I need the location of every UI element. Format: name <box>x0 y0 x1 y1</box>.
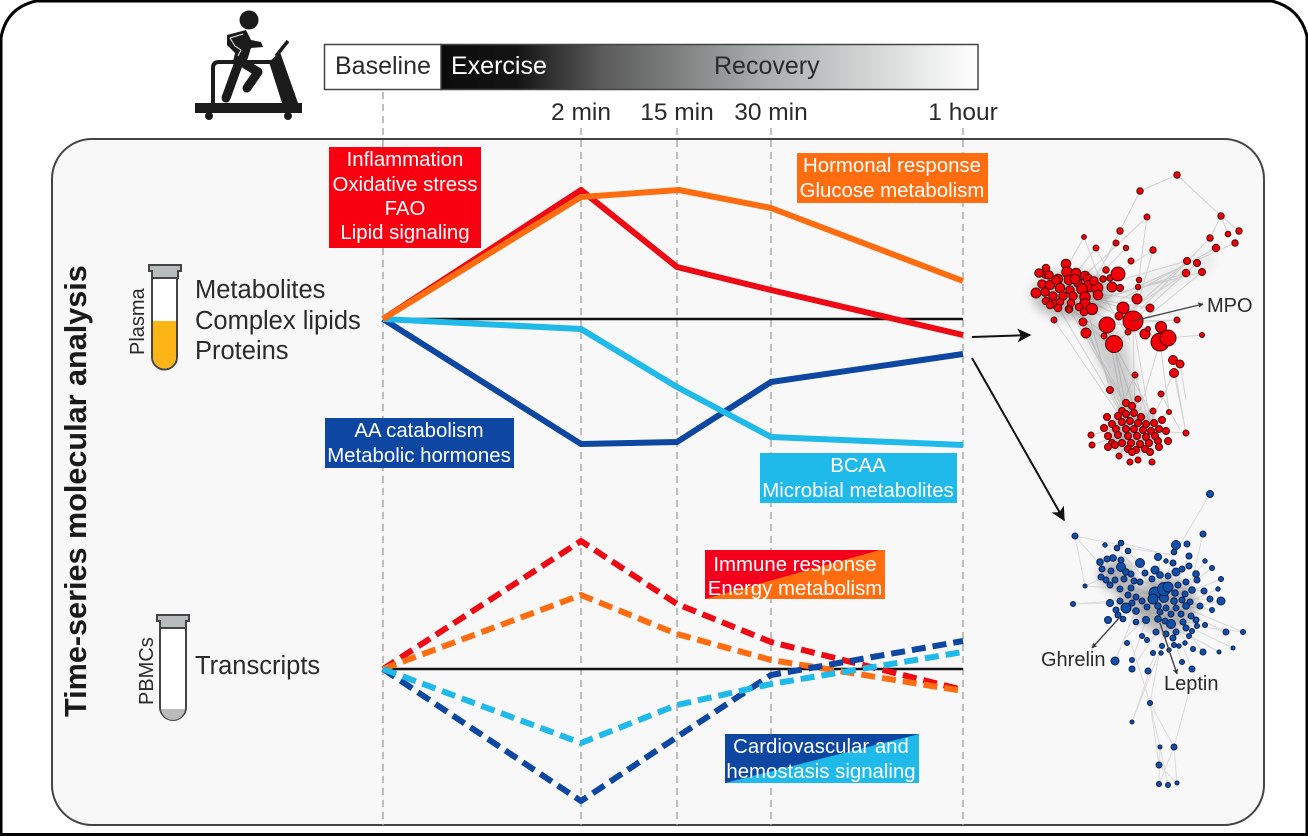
text: plasma analytes <box>195 276 361 365</box>
panel: time-series analysis <box>52 139 1264 825</box>
chart: transcript trajectories <box>383 541 963 801</box>
arrow: to blue network <box>972 358 1064 520</box>
callout: BCAA: Microbial metabolites <box>762 480 954 502</box>
timeline bar: Exercise <box>451 52 547 80</box>
callout: inflammation <box>329 147 481 248</box>
chart: plasma trajectories <box>383 190 963 445</box>
callout: inflammation: FAO <box>385 198 425 220</box>
callout: cardiovascular: hemostasis signaling <box>726 761 916 783</box>
timeline bar <box>324 44 978 90</box>
icon: person running on treadmill <box>195 10 302 120</box>
arrow: to red network <box>972 335 1030 337</box>
label: plasma: Plasma <box>127 287 149 355</box>
callout: cardiovascular <box>725 734 919 783</box>
callout: inflammation: Oxidative stress <box>332 174 478 196</box>
callout: hormonal response: Hormonal response <box>803 155 981 177</box>
callout: AA catabolism: Metabolic hormones <box>327 445 511 467</box>
time point guide lines <box>383 92 963 825</box>
time point labels: 1 hour <box>928 99 998 126</box>
callout: cardiovascular: Cardiovascular and <box>733 736 909 758</box>
callout: inflammation: Inflammation <box>347 149 463 171</box>
icon: plasma tube <box>149 265 181 370</box>
callout: AA catabolism: AA catabolism <box>354 420 484 442</box>
callout: immune response: Immune response <box>713 554 877 576</box>
time point labels: 30 min <box>734 99 808 126</box>
callout: immune response: Energy metabolism <box>708 578 882 600</box>
callout: inflammation: Lipid signaling <box>340 222 470 244</box>
time point labels <box>551 99 998 126</box>
network: transcript blue <box>1070 490 1246 788</box>
label: Ghrelin: Ghrelin <box>1041 649 1105 671</box>
title: Time-series molecular analysis <box>59 265 93 717</box>
timeline bar: Recovery <box>714 52 820 80</box>
label: PBMCs: PBMCs <box>136 637 158 705</box>
time point labels: 2 min <box>551 99 611 126</box>
text: plasma analytes: Complex lipids <box>195 307 361 335</box>
callout: immune response <box>705 550 885 600</box>
label: MPO: MPO <box>1207 295 1253 317</box>
text: transcripts: Transcripts <box>195 652 320 680</box>
time point labels: 15 min <box>640 99 714 126</box>
text: plasma analytes: Metabolites <box>195 276 325 304</box>
icon: PBMC tube <box>157 615 189 720</box>
callout: BCAA: BCAA <box>830 455 886 477</box>
timeline bar: Baseline <box>335 52 431 80</box>
text: plasma analytes: Proteins <box>195 337 289 365</box>
callout: hormonal response <box>797 153 988 203</box>
callout: hormonal response: Glucose metabolism <box>800 180 984 202</box>
callout: BCAA <box>760 453 957 503</box>
callout: AA catabolism <box>325 418 514 468</box>
label: Leptin: Leptin <box>1164 673 1218 695</box>
network: protein red <box>1031 172 1242 465</box>
